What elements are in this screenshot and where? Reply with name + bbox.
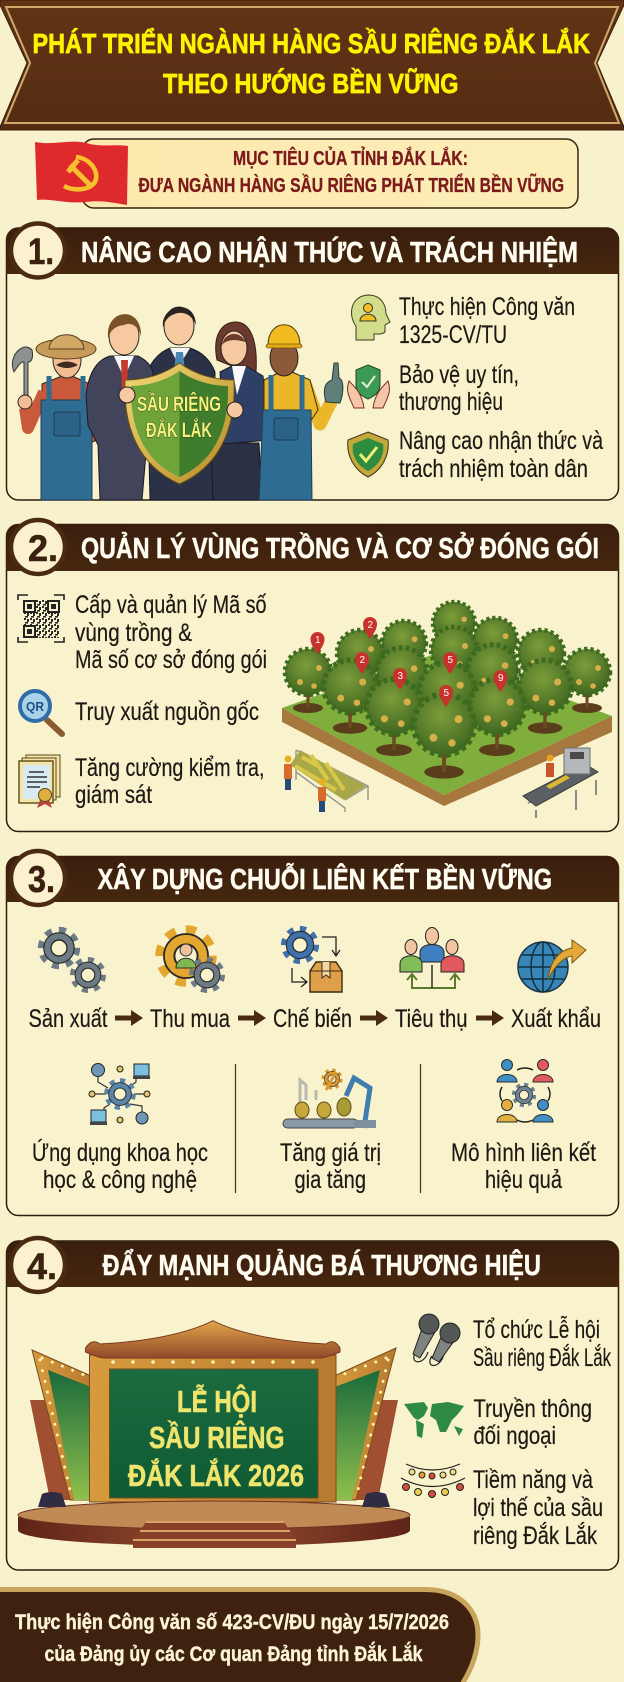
panel 2: growing areas: vùng trồng & (75, 619, 192, 647)
panel 1: awareness: Bảo vệ uy tín, (399, 361, 519, 389)
stage sign text: SẦU RIÊNG (149, 1419, 284, 1455)
sorting table with workers (284, 750, 368, 812)
icon: globe with arrow (518, 940, 586, 992)
column: science and technology (32, 1138, 208, 1194)
illustration: durian orchard (282, 602, 612, 818)
value chain steps: Thu mua (150, 1005, 230, 1033)
location pins: 2 (360, 655, 366, 666)
icon: science and technology network (89, 1064, 150, 1125)
location pins: 9 (498, 673, 504, 684)
column: science and technology: Ứng dụng khoa học (32, 1138, 208, 1167)
icon: hands holding shield (348, 365, 389, 408)
panel 2: growing areas: Cấp và quản lý Mã số (75, 591, 267, 619)
shield: ĐẮK LẮK (146, 418, 212, 442)
section 3 header: 3. (28, 859, 55, 900)
stage sign text (128, 1383, 304, 1493)
icon: group of consumers (400, 928, 464, 988)
arrow (238, 1010, 266, 1026)
section 2 header: 2. (28, 528, 58, 569)
shield (125, 363, 234, 484)
icon: QR magnifier (20, 691, 62, 734)
section 4 header: 4. (27, 1246, 57, 1287)
location pins (310, 617, 508, 707)
goal callout (35, 139, 578, 208)
icon: party flag (35, 142, 128, 205)
footer: của Đảng ủy các Cơ quan Đảng tỉnh Đắk Lắk (44, 1642, 423, 1666)
panel 3: value chain (6, 851, 619, 1216)
section 4 header (6, 1238, 619, 1292)
value chain steps: Tiêu thụ (395, 1005, 468, 1033)
icon: linkage model (497, 1060, 553, 1122)
icon: green check shield (348, 432, 388, 477)
column: science and technology: học & công nghệ (43, 1166, 197, 1194)
arrow (476, 1010, 504, 1026)
value chain steps: Xuất khẩu (511, 1005, 601, 1033)
icon: conveyor robot arm with durians (283, 1070, 376, 1128)
arrow (115, 1010, 143, 1026)
shield: SẦU RIÊNG (137, 392, 221, 416)
panel 4: brand promotion (6, 1238, 619, 1570)
panel 1: awareness (6, 224, 619, 500)
divider (420, 1064, 422, 1193)
panel 2: growing areas: Tăng cường kiểm tra, (75, 754, 264, 782)
goal callout: MỤC TIÊU CỦA TỈNH ĐẮK LẮK: (233, 146, 468, 170)
section 1 header (6, 224, 619, 278)
location pins: 1 (315, 635, 321, 646)
title banner (0, 0, 624, 130)
location pins: 3 (398, 671, 404, 682)
column: linkage model: Mô hình liên kết (451, 1139, 596, 1167)
icon: QR code (18, 595, 64, 642)
illustration: festival stage (18, 1321, 410, 1548)
column: added value: gia tăng (294, 1166, 366, 1194)
icon: microphones (413, 1314, 460, 1366)
packing machine (523, 748, 598, 818)
icon: festival lights (401, 1464, 465, 1498)
icon: QR magnifier: QR (26, 699, 45, 714)
panel 4: brand promotion: đối ngoại (474, 1422, 556, 1450)
column: linkage model: hiệu quả (485, 1166, 562, 1194)
column: added value: Tăng giá trị (280, 1139, 381, 1167)
icon: gear and box processing (283, 928, 342, 992)
illustration: group of people with shield (12, 307, 343, 500)
icon: certificate (19, 755, 60, 808)
value chain steps: Sản xuất (28, 1005, 108, 1033)
column: linkage model (451, 1139, 596, 1194)
panel 1: awareness: thương hiệu (399, 388, 503, 416)
icon: gear with person (159, 929, 223, 991)
icon: gears (41, 930, 104, 991)
location pins: 5 (448, 655, 454, 666)
location pins: 5 (444, 688, 450, 699)
stage sign text: ĐẮK LẮK 2026 (128, 1457, 304, 1493)
section 3 header (6, 851, 619, 905)
panel 2: growing areas: Mã số cơ sở đóng gói (75, 646, 267, 674)
value chain steps (28, 1005, 601, 1033)
value chain steps: Chế biến (273, 1005, 352, 1033)
panel 4: brand promotion: Tiềm năng và (473, 1466, 593, 1494)
section 2 header (6, 520, 619, 574)
icon: world map (404, 1402, 464, 1438)
location pins: 2 (368, 620, 374, 631)
panel 1: awareness: Thực hiện Công văn (399, 293, 575, 321)
section 1 header: 1. (28, 231, 54, 272)
panel 2: growing areas: Truy xuất nguồn gốc (75, 698, 259, 726)
arrow (360, 1010, 388, 1026)
panel 1: awareness: 1325-CV/TU (399, 321, 507, 349)
column: added value (280, 1139, 381, 1194)
panel 2: growing areas: giám sát (75, 781, 152, 809)
panel 2: growing areas (6, 520, 619, 832)
panel 4: brand promotion: Truyền thông (474, 1395, 592, 1423)
stage sign text: LỄ HỘI (177, 1383, 257, 1419)
title banner: THEO HƯỚNG BỀN VỮNG (163, 68, 458, 99)
panel 4: brand promotion: riêng Đắk Lắk (473, 1521, 597, 1550)
divider (234, 1064, 236, 1193)
footer (0, 1590, 478, 1682)
footer: Thực hiện Công văn số 423-CV/ĐU ngày 15/7/2026 (15, 1611, 449, 1634)
icon: head with person (352, 295, 390, 340)
